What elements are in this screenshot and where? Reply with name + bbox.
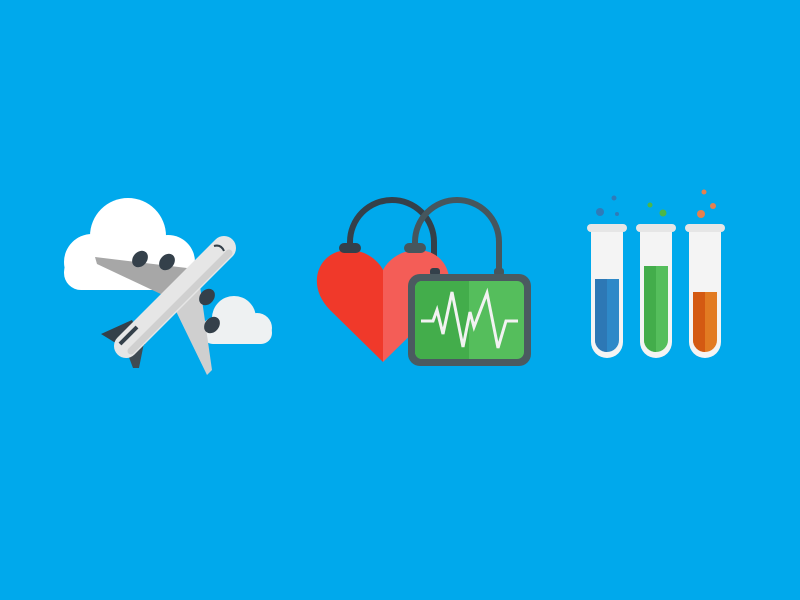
cables	[350, 200, 434, 272]
icon: test tubes	[587, 190, 725, 358]
monitor	[408, 274, 531, 366]
icon: heart with heart monitor	[317, 200, 531, 366]
icon: airplane with clouds	[64, 198, 272, 375]
connectors	[339, 243, 361, 253]
tube: blue	[587, 196, 627, 358]
heart	[317, 250, 383, 362]
cloud: large	[64, 198, 196, 290]
airplane	[95, 246, 229, 375]
tube: orange	[685, 190, 725, 358]
waveform	[421, 292, 518, 348]
cloud: small	[202, 296, 272, 344]
tube: green	[636, 202, 676, 358]
